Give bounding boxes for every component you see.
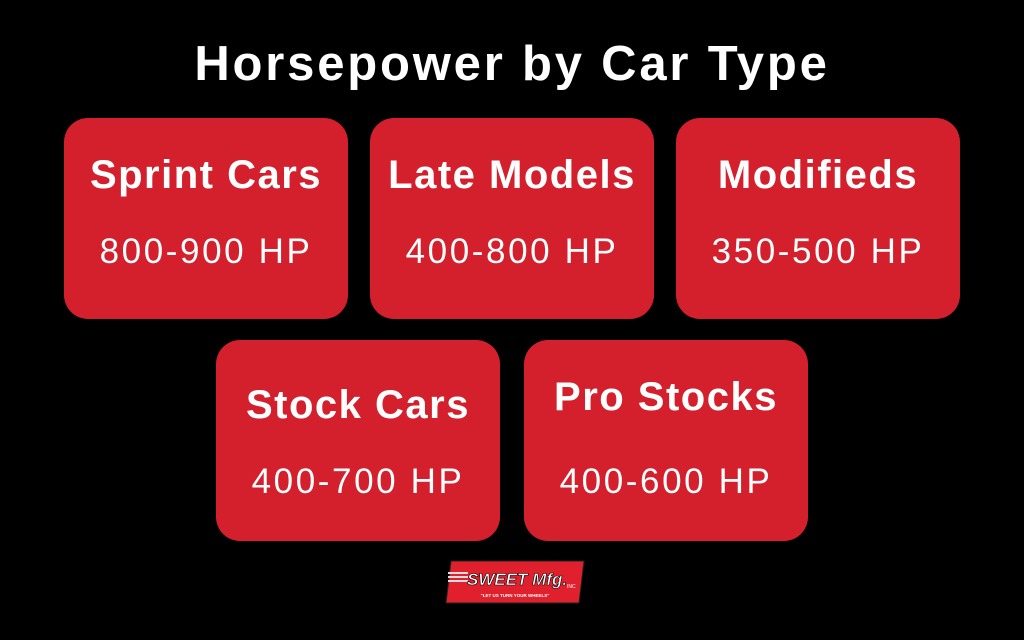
logo: INC: [567, 584, 576, 590]
logo: "LET US TURN YOUR WHEELS": [481, 593, 549, 598]
card: late models: Late Models: [388, 153, 636, 197]
card: sprint cars: 800-900 HP: [100, 232, 312, 271]
title: Horsepower by Car Type: [194, 37, 830, 91]
card: late models: 400-800 HP: [406, 232, 618, 271]
card: pro stocks: [524, 340, 808, 541]
card: stock cars: 400-700 HP: [252, 462, 464, 501]
logo: [446, 560, 584, 604]
logo: SWEET Mfg.: [467, 570, 567, 589]
card: modifieds: [676, 118, 960, 319]
card: late models: [370, 118, 654, 319]
card: modifieds: 350-500 HP: [712, 232, 924, 271]
card: pro stocks: Pro Stocks: [554, 375, 778, 419]
card: sprint cars: Sprint Cars: [90, 153, 322, 197]
card: modifieds: Modifieds: [718, 153, 918, 197]
card: stock cars: Stock Cars: [246, 383, 470, 427]
card: stock cars: [216, 340, 500, 541]
card: pro stocks: 400-600 HP: [560, 462, 772, 501]
card: sprint cars: [64, 118, 348, 319]
